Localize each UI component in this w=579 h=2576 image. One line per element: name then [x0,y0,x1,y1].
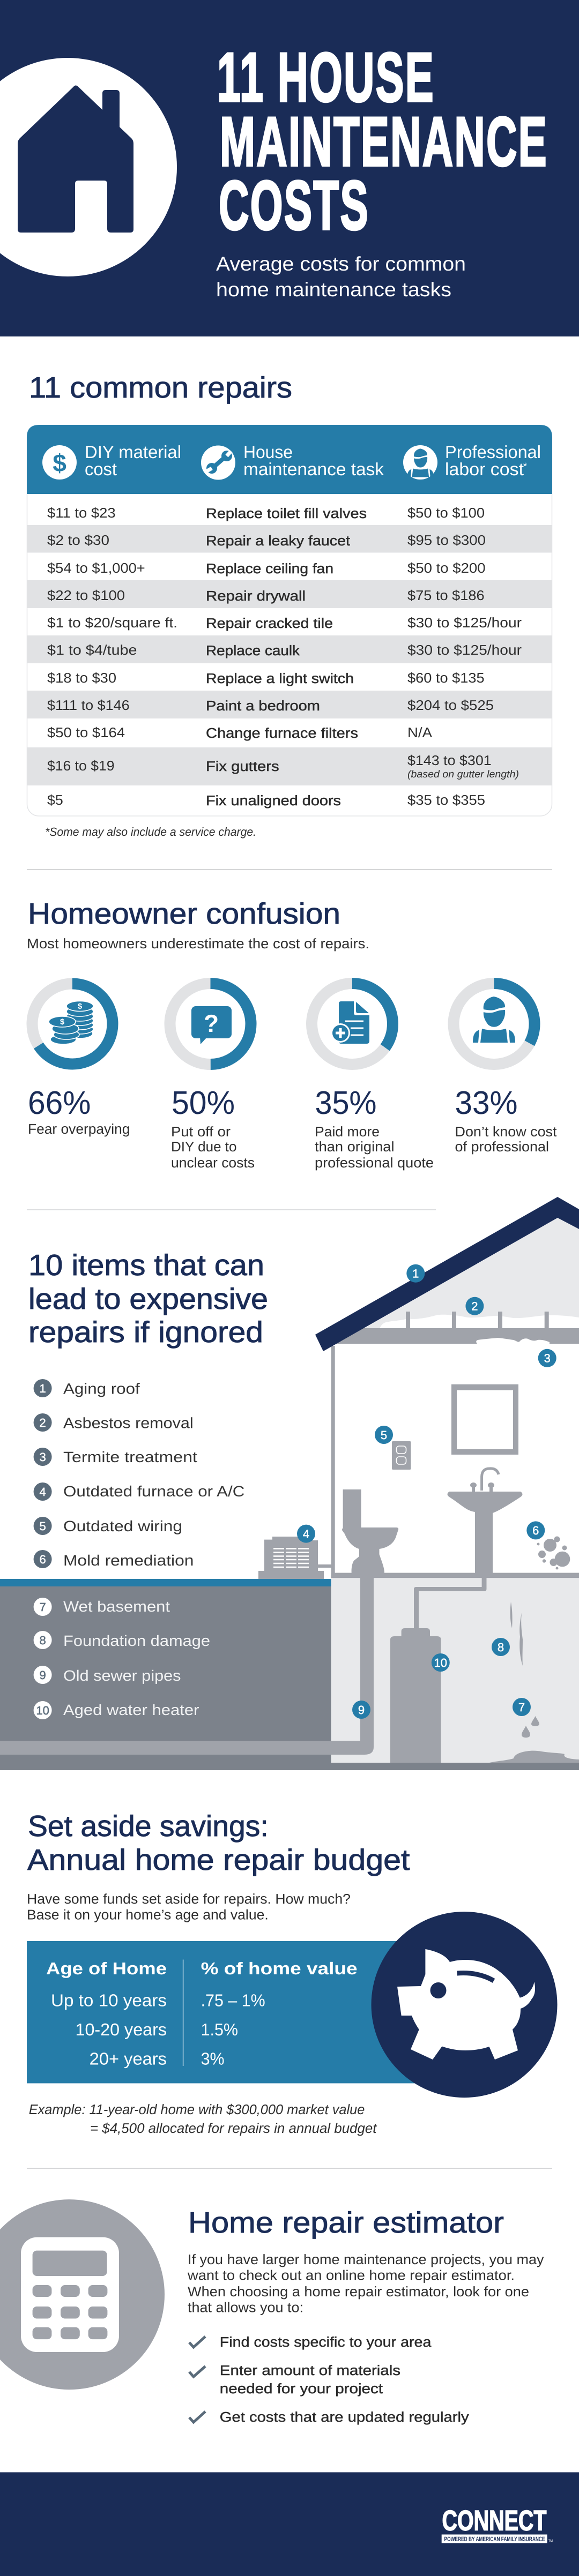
illustration number markers: 2 [471,1300,478,1313]
estimator paragraph: If you have larger home maintenance projects, you may [188,2251,544,2267]
age of home column: 10-20 years [75,2020,167,2039]
label: Put off or [171,1124,231,1140]
illustration number markers: 10 [434,1656,447,1669]
example text [29,2101,377,2136]
stat: 33% [454,984,557,1155]
icon: piggy bank [371,1912,558,2098]
label: Paid more [315,1124,380,1140]
list: items 7-10: 10 [36,1704,49,1717]
column: professional labor cost: $60 to $135 [407,670,485,686]
heading: home repair estimator: Home repair estimator [188,2206,504,2239]
age of home column: Up to 10 years [51,1991,167,2010]
estimator paragraph: want to check out an online home repair estimator. [187,2267,515,2283]
savings intro text: Base it on your home’s age and value. [27,1907,269,1923]
illustration number markers [297,1264,556,1719]
list: items 1-6: Asbestos removal [63,1415,194,1432]
checklist: needed for your project [220,2380,383,2397]
icon: question bubble [191,1006,232,1044]
list: items 1-6 [34,1379,244,1569]
column: professional labor cost: $30 to $125/hour [407,642,522,658]
column: DIY material cost [47,505,177,808]
title: 11 HOUSE [217,38,435,116]
column: professional labor cost: $75 to $186 [407,587,485,603]
33 percent: 33% [455,1084,518,1121]
column: professional labor cost: $143 to $301 [407,752,492,768]
subtitle: Average costs for common [216,253,466,275]
icon: dollar [42,445,77,480]
column: DIY material cost: $1 to $4/tube [47,642,137,658]
illustration number markers: 5 [381,1428,387,1442]
list: items 7-10: Wet basement [63,1598,170,1615]
illustration number markers: 4 [303,1527,309,1541]
column headings: House [243,442,293,462]
illustration number markers: 8 [498,1641,504,1654]
walls and floor [331,1346,579,1578]
heading: set aside savings: Set aside savings: [28,1809,269,1843]
column: professional labor cost: (based on gutter length) [407,769,519,780]
list: items 7-10: Old sewer pipes [63,1667,181,1684]
footer [0,2472,579,2576]
title [217,38,548,244]
checklist: Enter amount of materials [220,2362,400,2378]
label: DIY due to [171,1139,237,1155]
floor line [331,1763,579,1770]
logo: Connect: CONNECT [442,2505,547,2536]
age of home column: 20+ years [90,2049,167,2068]
water heater [390,1578,487,1763]
heading: 11 common repairs: 11 common repairs [29,371,292,404]
column: DIY material cost: $18 to $30 [47,670,116,686]
illustration number markers: 9 [358,1703,365,1717]
column headings: DIY material [85,442,181,462]
icon: worker [473,997,515,1043]
column: professional labor cost: $50 to $200 [407,560,486,576]
column: house maintenance task: Repair a leaky faucet [206,533,351,549]
column: DIY material cost: $5 [47,792,63,808]
list: items 1-6: 5 [39,1519,46,1533]
heading: set aside savings [27,1809,410,1876]
label [455,1124,557,1155]
footnote: *Some may also include a service charge. [45,825,256,838]
outlet [392,1441,411,1470]
logo: Connect [442,2505,553,2543]
column: DIY material cost: $22 to $100 [47,587,125,603]
column: house maintenance task: Repair cracked tile [206,615,333,631]
list: items 1-6: Termite treatment [63,1449,197,1465]
column headings: cost [85,459,117,479]
header banner [0,0,579,336]
column: professional labor cost: $50 to $100 [407,505,485,521]
list: items 7-10: 8 [39,1634,46,1647]
column: DIY material cost: $11 to $23 [47,505,116,521]
icon: worker [403,445,437,480]
label: of professional [455,1139,549,1155]
donut 35% [312,984,392,1064]
column: house maintenance task: Replace a light switch [206,670,354,686]
age of home column: Age of Home [46,1959,167,1978]
label: unclear costs [171,1155,255,1171]
heading: homeowner confusion: Homeowner confusion [28,897,340,930]
heading: 10 items: repairs if ignored [28,1315,263,1349]
icon: calculator [0,2199,165,2390]
list: items 1-6: 3 [39,1450,46,1464]
mirror [451,1384,518,1455]
50 percent: 50% [172,1084,235,1121]
water drops and puddle [489,1716,579,1763]
stat: 66% [28,984,130,1137]
illustration number markers: 1 [412,1267,419,1280]
subtitle [216,253,466,301]
percent of home value column [201,1959,358,2068]
column: professional labor cost [407,505,522,808]
label: than original [315,1139,395,1155]
heading: 10 items: lead to expensive [28,1282,268,1315]
column: professional labor cost: $204 to $525 [407,697,494,713]
column: house maintenance task: Fix unaligned doors [206,792,341,808]
column: house maintenance task: Paint a bedroom [206,698,320,714]
donut 66% [32,984,113,1064]
list: items 1-6: Outdated wiring [63,1518,182,1534]
column: house maintenance task [206,505,367,808]
column: professional labor cost: $95 to $300 [407,532,486,548]
column headings: * [523,461,527,471]
attic insulation [363,1218,579,1329]
stat: 35% [312,984,434,1171]
title: COSTS [219,166,369,244]
stat: 50% [170,984,255,1171]
checklist: Get costs that are updated regularly [220,2409,469,2425]
checklist: Find costs specific to your area [220,2334,432,2350]
column: house maintenance task: Change furnace filters [206,725,358,741]
label [171,1124,255,1171]
donut 50% [170,984,251,1064]
table header [27,425,552,494]
list: items 7-10: 7 [39,1600,46,1614]
list: items 7-10 [34,1598,210,1719]
icon: coins: $ [78,1002,83,1011]
column: DIY material cost: $2 to $30 [47,532,109,548]
label: Fear overpaying [28,1121,130,1137]
column headings: labor cost [445,459,524,479]
label [315,1124,434,1171]
list: items 7-10: Foundation damage [63,1633,210,1649]
heading: set aside savings: Annual home repair budget [27,1843,410,1876]
shaded rows [27,525,552,785]
estimator paragraph: that allows you to: [188,2300,303,2316]
donut 33% [454,984,535,1064]
estimator paragraph [187,2251,544,2316]
savings intro text: Have some funds set aside for repairs. How much? [27,1891,351,1907]
illustration number markers: 6 [532,1524,539,1537]
35 percent: 35% [315,1084,376,1121]
column: DIY material cost: $1 to $20/square ft. [47,615,177,631]
icon: document with plus [331,1001,369,1044]
ground and basement bands [0,1578,579,1770]
sink [447,1469,522,1573]
list: items 7-10: 9 [39,1668,46,1682]
column: house maintenance task: Repair drywall [206,588,306,604]
heading: 10 items [28,1248,268,1349]
estimator paragraph: When choosing a home repair estimator, look for one [188,2283,529,2300]
column headings: maintenance task [243,459,384,479]
joists and ceiling beam [336,1312,579,1344]
icon: house in white circle [0,58,177,276]
percent of home value column: 1.5% [201,2020,238,2039]
mold [537,1537,570,1570]
panel: repairs table [27,425,552,816]
heading: 10 items: 10 items that can [28,1248,264,1282]
icon: wrench [201,446,235,480]
subtitle: home maintenance tasks [216,279,451,301]
icon: question bubble: ? [204,1009,219,1037]
column: DIY material cost: $50 to $164 [47,724,125,740]
column headings: Professional [445,442,541,462]
checklist [189,2334,469,2425]
column: professional labor cost: $30 to $125/hour [407,615,522,631]
column: DIY material cost: $54 to $1,000+ [47,560,145,576]
toilet [342,1489,398,1573]
savings intro text [27,1891,351,1923]
column: house maintenance task: Fix gutters [206,758,279,774]
column headings [85,442,541,479]
list: items 1-6: Aging roof [63,1381,140,1397]
age of home column [46,1959,167,2068]
intro text: Most homeowners underestimate the cost of repairs. [27,935,369,952]
example text: Example: 11-year-old home with $300,000 market value [29,2101,365,2117]
column: house maintenance task: Replace ceiling fan [206,560,333,576]
icon: coins [49,1001,93,1044]
column: professional labor cost: $35 to $355 [407,792,485,808]
illustration: house cross-section [0,1197,579,1770]
illustration number markers: 7 [518,1701,525,1714]
panel: budget table [27,1941,445,2083]
termite damage [476,1338,550,1344]
column: professional labor cost: N/A [407,724,433,740]
illustration number markers: 3 [544,1351,551,1365]
icon: dollar: $ [53,449,66,477]
roof [315,1197,579,1351]
percent of home value column: .75 – 1% [201,1991,265,2010]
percent of home value column: 3% [201,2049,225,2068]
list: items 1-6: Mold remediation [63,1552,194,1569]
example text: = $4,500 allocated for repairs in annual budget [90,2120,377,2136]
column: DIY material cost: $111 to $146 [47,697,130,713]
sewer pipe [0,1578,374,1755]
list: items 1-6: 6 [39,1553,46,1566]
AC unit [258,1537,331,1579]
list: items 1-6: 4 [39,1485,46,1499]
list: items 1-6: 2 [39,1416,46,1429]
66 percent: 66% [28,1084,91,1121]
label: Don’t know cost [455,1124,557,1140]
column: house maintenance task: Replace caulk [206,642,300,658]
logo: Connect: TM [548,2540,553,2543]
icon: coins: $ [60,1017,65,1027]
foundation cracks [510,1602,523,1666]
percent of home value column: % of home value [201,1959,358,1978]
column: house maintenance task: Replace toilet fill valves [206,505,367,521]
column: DIY material cost: $16 to $19 [47,758,115,774]
label: professional quote [315,1155,434,1171]
list: items 1-6: Outdated furnace or A/C [63,1483,244,1500]
list: items 7-10: Aged water heater [63,1702,199,1718]
list: items 1-6: 1 [39,1382,46,1395]
